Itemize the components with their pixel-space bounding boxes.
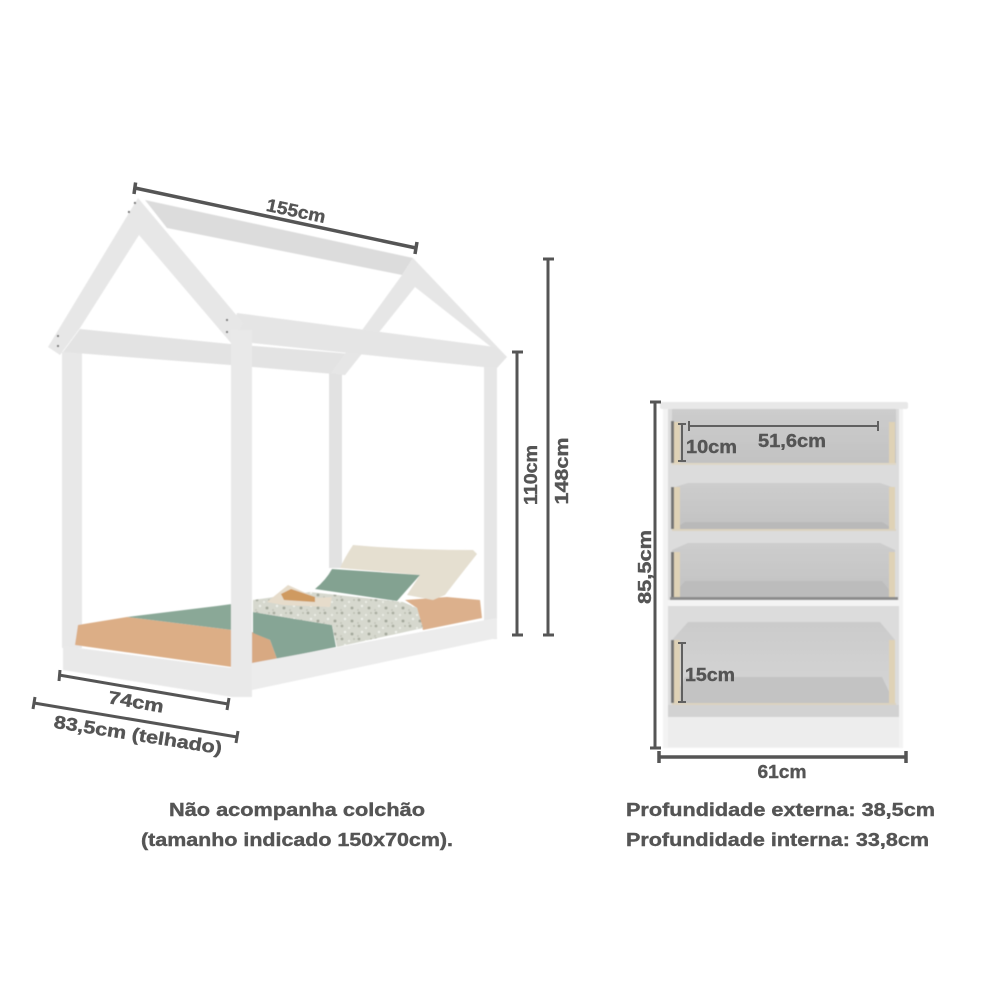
bed back post xyxy=(329,370,342,568)
mattress xyxy=(75,597,482,667)
bed gable screws xyxy=(57,202,228,347)
note: dresser depth xyxy=(626,800,935,850)
bed front beam xyxy=(231,313,507,368)
dimension: 148cm xyxy=(543,259,572,635)
bed front post xyxy=(231,330,252,697)
bed side rail xyxy=(252,618,497,690)
note: dresser depth: Profundidade interna: 33,8cm xyxy=(626,830,929,850)
dimension: 110cm xyxy=(512,352,541,635)
bed left post xyxy=(62,352,82,648)
dimension: 155cm: 155cm xyxy=(265,195,327,227)
dimension: 15cm: 15cm xyxy=(685,665,735,685)
dimension: 148cm: 148cm xyxy=(552,438,572,504)
dimension: 85,5cm: 85,5cm xyxy=(635,530,655,604)
dimension: 83,5cm roof xyxy=(33,697,238,758)
dimension: 74cm: 74cm xyxy=(107,687,165,717)
dimension: 51,6cm xyxy=(689,421,878,451)
drawer 1 xyxy=(671,409,896,465)
note: mattress not included xyxy=(141,800,453,850)
drawer 3 xyxy=(670,543,898,600)
dresser top xyxy=(660,402,908,409)
dresser plinth xyxy=(668,717,899,747)
bed back beam xyxy=(63,329,360,375)
cream pillow xyxy=(340,545,477,600)
dimension: 15cm xyxy=(678,643,735,702)
floral bedspread xyxy=(253,592,423,647)
dimension: 10cm: 10cm xyxy=(686,437,737,457)
dimension: 10cm xyxy=(678,424,737,461)
bed front rail xyxy=(63,646,232,697)
dimension: 110cm: 110cm xyxy=(521,445,541,505)
note: mattress not included: Não acompanha colchão xyxy=(169,800,425,820)
dresser lower interior xyxy=(668,705,899,717)
note: dresser depth: Profundidade externa: 38,5cm xyxy=(626,800,935,820)
dresser interior xyxy=(668,409,899,717)
dimension: 61cm xyxy=(659,751,906,782)
dimension: 85,5cm xyxy=(635,402,661,748)
bed roof ridge panel xyxy=(145,200,413,275)
dresser divider shelf xyxy=(668,600,899,606)
illustration: house bed xyxy=(48,198,507,697)
bed left gable xyxy=(48,198,243,355)
dimension: 51,6cm: 51,6cm xyxy=(758,431,826,451)
dimension: 61cm: 61cm xyxy=(758,762,806,782)
illustration: dresser xyxy=(660,402,908,748)
toy xyxy=(267,585,332,607)
dimension: 74cm xyxy=(59,670,229,717)
drawer 2 xyxy=(671,483,896,531)
drawer 4 xyxy=(671,622,896,705)
dimension: 83,5cm roof: 83,5cm (telhado) xyxy=(52,712,224,758)
bed right post xyxy=(484,365,497,639)
dresser body xyxy=(663,405,903,748)
green pillow xyxy=(315,569,420,601)
bed right gable xyxy=(331,258,507,375)
dimension: 155cm xyxy=(134,182,417,254)
note: mattress not included: (tamanho indicado 150x70cm). xyxy=(141,830,453,850)
green blanket xyxy=(127,604,336,659)
